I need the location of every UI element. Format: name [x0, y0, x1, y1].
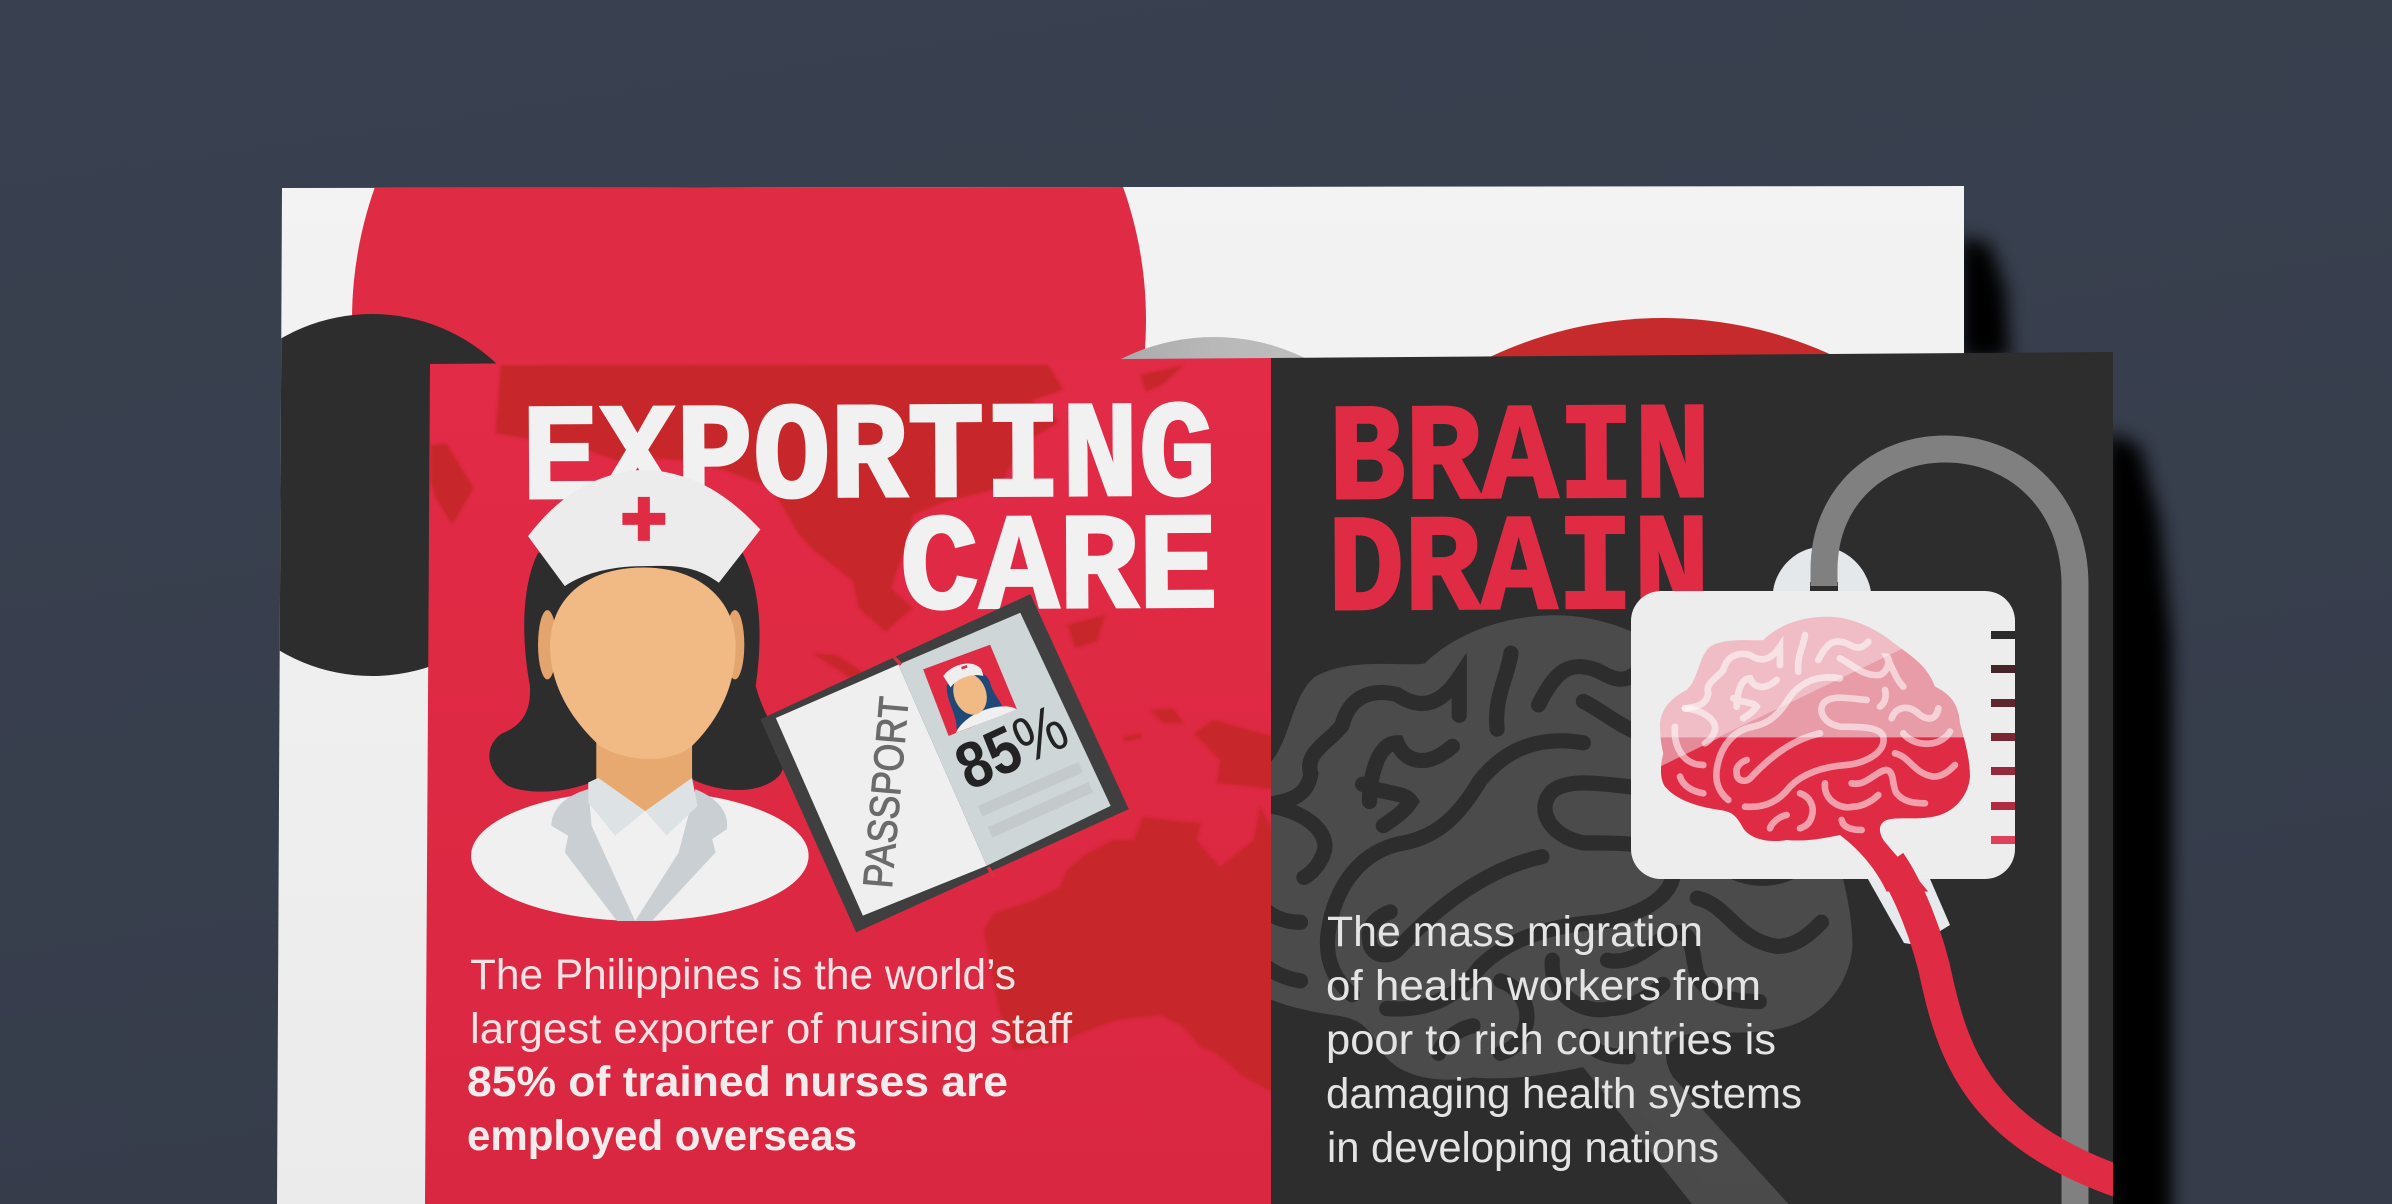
shadow of back page: [1960, 236, 2010, 360]
measurement ticks: [1991, 631, 2015, 844]
icon: iv bag with brain: [1631, 591, 2015, 923]
panel: exporting care: [425, 358, 1275, 1204]
text block: mass migration: [1326, 908, 1802, 1172]
title: brain drain: DRAIN: [1327, 494, 1710, 651]
title: brain drain: [1334, 404, 1704, 610]
title: brain drain: BRAIN: [1328, 383, 1711, 540]
text block: philippines: largest exporter of nursing staff: [470, 1005, 1073, 1053]
text block: mass migration: of health workers from: [1326, 962, 1761, 1010]
icon: iv bag port: [1868, 879, 1950, 944]
title: exporting care: [521, 381, 1218, 650]
back page grey circle: [1120, 337, 1304, 360]
passport figure 85%: 85%: [944, 690, 1078, 804]
text block: mass migration: poor to rich countries is: [1326, 1016, 1776, 1064]
icon: nurse cap: [528, 470, 760, 586]
text block: philippines: [467, 951, 1073, 1160]
title: exporting care: EXPORTING: [521, 381, 1216, 540]
brain: [1653, 610, 1987, 923]
title: exporting care: CARE: [899, 493, 1218, 650]
icon: blood tube: [1890, 862, 2120, 1182]
back page dark red circle: [1491, 318, 1830, 356]
passport label: PASSPORT: [855, 695, 917, 890]
icon: passport: [760, 594, 1129, 932]
panel: back page: [277, 186, 1964, 1204]
text block: philippines: 85% of trained nurses are: [467, 1058, 1008, 1106]
icon: nurse: [471, 470, 809, 921]
background brain silhouette: [1211, 615, 1852, 1204]
text block: mass migration: in developing nations: [1327, 1124, 1719, 1172]
world map: [430, 365, 1275, 1093]
back page red circle: [352, 187, 1146, 364]
panel: brain drain: [1211, 352, 2120, 1204]
text block: mass migration: damaging health systems: [1326, 1070, 1802, 1118]
shadow of front card: [2105, 432, 2172, 1204]
passport photo: [923, 645, 1017, 737]
text block: philippines: The Philippines is the world’s: [470, 951, 1016, 999]
back page black circle: [280, 314, 496, 676]
text block: mass migration: The mass migration: [1327, 908, 1703, 956]
text block: philippines: employed overseas: [467, 1112, 857, 1160]
nurse and passport illustration: [471, 470, 1129, 932]
icon: iv tube: [1773, 449, 2075, 1204]
